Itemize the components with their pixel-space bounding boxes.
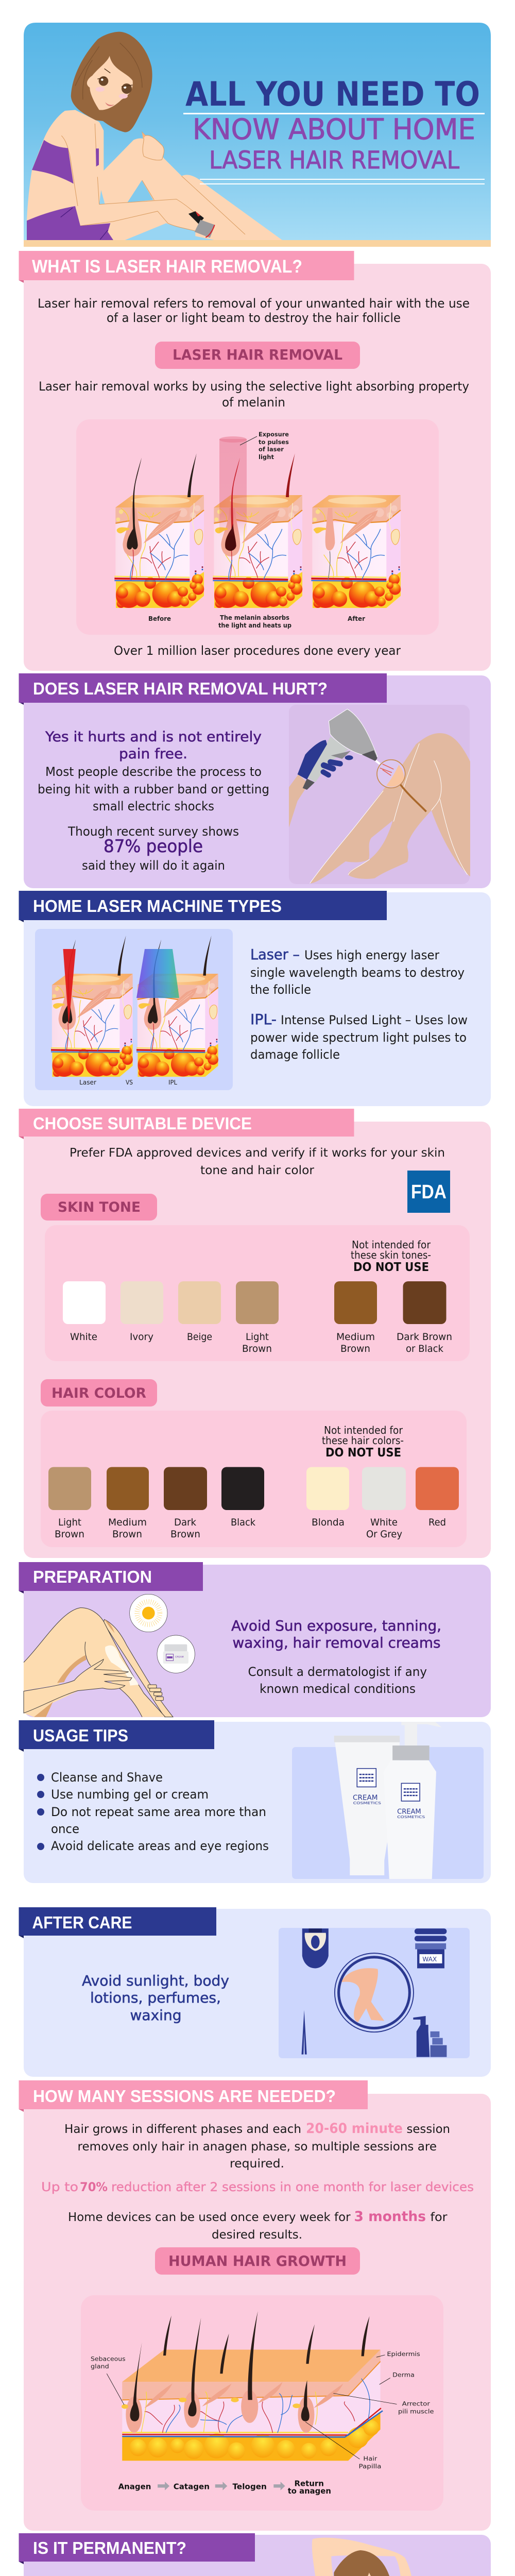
phases text: session — [407, 2123, 450, 2136]
title: KNOW ABOUT HOME — [193, 113, 475, 146]
title: ALL YOU NEED TO — [185, 75, 480, 114]
after care text: Avoid sunlight, body — [82, 1972, 229, 1989]
phases text: required. — [230, 2157, 284, 2171]
icon: cream jar: CREAM — [175, 1655, 184, 1658]
warning: skin: DO NOT USE — [353, 1261, 429, 1274]
intro text — [70, 1146, 445, 1177]
hair color label — [41, 1379, 157, 1406]
avoid text: waxing, hair removal creams — [233, 1634, 441, 1651]
illustration: applying cream to leg — [24, 1594, 195, 1717]
icon: tweezers — [302, 2010, 307, 2055]
skin tone swatches — [45, 1225, 470, 1361]
growth cycle: Anagen — [118, 2483, 151, 2492]
heading: USAGE TIPS — [33, 1726, 128, 1745]
skin tone names: Medium — [336, 1331, 375, 1343]
how it works text: Laser hair removal works by using the selective light absorbing property — [39, 379, 469, 394]
heading: AFTER CARE — [32, 1913, 132, 1932]
ipl description: damage follicle — [250, 1047, 340, 1062]
heading: HOW MANY SESSIONS ARE NEEDED? — [33, 2087, 336, 2106]
diagram: human hair growth: Papilla — [358, 2463, 381, 2470]
phases text: removes only hair in anagen phase, so multiple sessions are — [77, 2140, 437, 2154]
definition text: of a laser or light beam to destroy the hair follicle — [107, 311, 401, 325]
diagram: human hair growth: Sebaceous — [91, 2355, 126, 2362]
avoid text — [231, 1617, 441, 1651]
pain text: Though recent survey shows — [67, 824, 239, 839]
heading: DOES LASER HAIR REMOVAL HURT? — [33, 679, 328, 698]
pain text: being hit with a rubber band or getting — [38, 782, 269, 796]
icon: cream jar — [157, 1635, 195, 1673]
avoid text: Avoid Sun exposure, tanning, — [231, 1617, 441, 1634]
skin: laser — [51, 936, 133, 1077]
header banner — [24, 23, 491, 247]
tips list: Cleanse and Shave — [51, 1770, 163, 1785]
heading — [19, 891, 387, 920]
illustration: cream products: CREAM — [397, 1808, 421, 1816]
illustration: cream products: COSMETICS — [353, 1801, 382, 1805]
warning: hair: Not intended for — [324, 1424, 403, 1436]
after care text — [82, 1972, 229, 2024]
phases text: 20-60 minute — [306, 2121, 403, 2137]
heading — [19, 1720, 214, 1749]
diagram labels: light — [259, 453, 274, 461]
laser description: Laser – — [250, 946, 300, 963]
pain text — [38, 729, 269, 873]
tips list: Avoid delicate areas and eye regions — [51, 1839, 269, 1853]
panel: what is laser hair removal — [19, 251, 491, 671]
heading — [19, 1907, 216, 1936]
growth cycle: Catagen — [174, 2483, 210, 2492]
diagram: laser vs ipl — [35, 929, 233, 1090]
diagram: human hair growth: Derma — [392, 2371, 415, 2379]
intro text: tone and hair color — [200, 1164, 315, 1177]
pain text: Yes it hurts and is not entirely — [45, 729, 262, 745]
statistic text: Over 1 million laser procedures done every year — [114, 643, 401, 658]
illustration: laser treatment on legs — [289, 705, 470, 884]
after care text: waxing — [130, 2007, 181, 2024]
diagram: human hair growth: Epidermis — [387, 2350, 420, 2358]
growth cycle: Telogen — [233, 2483, 267, 2492]
hair color names: Black — [231, 1517, 255, 1528]
home devices text: Home devices can be used once every week for — [68, 2211, 351, 2224]
heading — [19, 2533, 255, 2562]
illustration: woman with epilator — [312, 2538, 413, 2576]
fda logo: FDA — [411, 1181, 447, 1203]
skin tone names: Dark Brown — [397, 1331, 452, 1343]
title — [183, 75, 485, 184]
pain text: pain free. — [119, 746, 187, 762]
illustration: cream products: CREAM — [353, 1794, 377, 1802]
pain text: 87% people — [104, 836, 203, 857]
illustration: cream products: COSMETICS — [397, 1815, 425, 1819]
skin: before — [114, 453, 204, 608]
pain text: Most people describe the process to — [45, 765, 262, 779]
skin cross section — [122, 2350, 383, 2461]
icon: epilator — [302, 1928, 329, 1968]
panel: does it hurt — [19, 673, 491, 888]
heading: CHOOSE SUITABLE DEVICE — [33, 1114, 252, 1133]
hairs — [130, 2311, 370, 2421]
warning: hair — [322, 1424, 404, 1460]
how it works text — [39, 379, 469, 410]
warning: hair: DO NOT USE — [325, 1446, 401, 1460]
skin tone names: or Black — [406, 1343, 443, 1354]
diagram labels: After — [348, 615, 365, 622]
consult text: known medical conditions — [260, 1682, 416, 1696]
hair color names: Light — [58, 1517, 81, 1528]
laser description — [250, 946, 465, 997]
heading: WHAT IS LASER HAIR REMOVAL? — [32, 257, 302, 277]
labels: VS — [126, 1079, 133, 1086]
consult text: Consult a dermatologist if any — [248, 1665, 427, 1679]
warning: skin: these skin tones- — [351, 1249, 431, 1261]
icon: wax — [415, 1928, 447, 1968]
pain text: small electric shocks — [93, 799, 214, 814]
heading — [19, 2080, 368, 2109]
warning: skin — [351, 1239, 431, 1274]
panel: home laser machine types — [19, 891, 491, 1106]
diagram: human hair growth: gland — [91, 2363, 109, 2370]
reduction text: Up to — [41, 2180, 78, 2194]
diagram labels: of laser — [259, 446, 284, 453]
title: LASER HAIR REMOVAL — [209, 146, 459, 175]
consult text — [248, 1665, 427, 1696]
diagram: human hair growth: pili muscle — [398, 2408, 434, 2415]
sub heading pill — [155, 2247, 360, 2275]
heading: IS IT PERMANENT? — [33, 2538, 186, 2557]
home devices text: desired results. — [212, 2228, 302, 2242]
diagram labels: Before — [148, 615, 171, 622]
phases text: Hair grows in different phases and each — [64, 2123, 301, 2136]
skin tone names: Brown — [242, 1343, 272, 1354]
tips list: Use numbing gel or cream — [51, 1787, 209, 1802]
panel: how many sessions — [19, 2080, 491, 2531]
skin tone names: Brown — [340, 1343, 370, 1354]
ipl description: IPL- — [250, 1011, 277, 1028]
ipl beam — [136, 949, 179, 998]
icon: sun — [130, 1594, 167, 1632]
definition text — [38, 296, 470, 325]
diagram: human hair growth: Hair — [363, 2455, 377, 2462]
tips list — [37, 1770, 269, 1853]
skin: ipl — [136, 936, 218, 1077]
hair color names: Brown — [55, 1529, 84, 1540]
heading — [19, 251, 354, 280]
home devices text: 3 months — [354, 2209, 426, 2225]
panel: usage tips — [19, 1720, 491, 1883]
hair color names: Medium — [108, 1517, 147, 1528]
hair color label: HAIR COLOR — [52, 1385, 146, 1401]
warning: hair: these hair colors- — [322, 1434, 404, 1447]
sub heading pill: LASER HAIR REMOVAL — [173, 346, 342, 363]
diagram: before, during, after — [76, 419, 439, 635]
labels — [107, 2355, 397, 2459]
diagram labels: the light and heats up — [218, 622, 291, 629]
phases text — [64, 2121, 450, 2171]
reduction text: reduction after 2 sessions in one month for laser devices — [111, 2180, 474, 2194]
hair color names: Or Grey — [366, 1529, 402, 1540]
skin tone names — [70, 1331, 452, 1354]
warning: skin: Not intended for — [352, 1239, 431, 1251]
skin tone label: SKIN TONE — [58, 1199, 141, 1215]
after care text: lotions, perfumes, — [90, 1989, 221, 2006]
panel: preparation — [19, 1562, 491, 1717]
skin tone names: White — [70, 1331, 97, 1343]
pain text: said they will do it again — [82, 858, 225, 873]
icon: mirror with legs — [335, 1953, 414, 2032]
hair color swatches — [41, 1411, 467, 1547]
illustration: woman using laser device — [27, 32, 282, 240]
home devices text — [68, 2209, 448, 2242]
growth cycle: Return — [294, 2479, 324, 2488]
heading — [19, 1109, 354, 1137]
ipl description: Intense Pulsed Light – Uses low — [281, 1013, 468, 1027]
heading: PREPARATION — [33, 1567, 152, 1586]
hair color names: Red — [428, 1517, 446, 1528]
labels — [79, 1079, 177, 1086]
intro text: Prefer FDA approved devices and verify if it works for your skin — [70, 1146, 445, 1160]
diagram labels: to pulses — [259, 438, 289, 446]
skin tone names: Beige — [187, 1331, 212, 1343]
ipl description: power wide spectrum light pulses to — [250, 1030, 467, 1045]
diagram labels — [148, 431, 365, 629]
growth cycle: to anagen — [288, 2487, 331, 2496]
tips list: Do not repeat same area more than — [51, 1805, 266, 1819]
diagram labels: Exposure — [259, 431, 289, 438]
skin: after — [311, 495, 401, 608]
skin: melanin absorbs — [213, 453, 302, 608]
labels: Laser — [79, 1079, 96, 1086]
hair color names: Dark — [174, 1517, 196, 1528]
sub heading pill: HUMAN HAIR GROWTH — [168, 2252, 347, 2269]
laser description: the follicle — [250, 982, 311, 997]
definition text: Laser hair removal refers to removal of your unwanted hair with the use — [38, 296, 470, 311]
hair color names — [55, 1517, 446, 1540]
diagram: human hair growth — [81, 2295, 443, 2511]
heading — [19, 1562, 203, 1591]
laser beam — [63, 949, 76, 1025]
hair color names: Blonda — [312, 1517, 345, 1528]
laser description: single wavelength beams to destroy — [250, 965, 465, 980]
heading: HOME LASER MACHINE TYPES — [33, 896, 282, 916]
hair color names: Brown — [112, 1529, 142, 1540]
panel: is it permanent — [19, 2533, 491, 2576]
fda logo — [407, 1171, 450, 1213]
ipl description — [250, 1011, 468, 1062]
reduction text: 70% — [80, 2180, 108, 2194]
hair color names: Brown — [170, 1529, 200, 1540]
skin tone names: Light — [246, 1331, 269, 1343]
illustration: hair removal tools — [279, 1928, 470, 2058]
tips list: once — [51, 1822, 79, 1836]
panel: choose suitable device — [19, 1109, 491, 1558]
skin tone label — [41, 1194, 157, 1221]
illustration: cream products — [292, 1722, 484, 1879]
skin tone names: Ivory — [130, 1331, 153, 1343]
icon: wax: WAX — [422, 1956, 437, 1963]
icon: bottles — [413, 2016, 447, 2057]
laser description: Uses high energy laser — [304, 948, 439, 962]
home devices text: for — [431, 2211, 448, 2224]
panel: after care — [19, 1907, 491, 2077]
growth cycle — [118, 2479, 331, 2496]
diagram labels: The melanin absorbs — [220, 614, 289, 621]
labels: IPL — [168, 1079, 177, 1086]
diagram: human hair growth: Arrector — [402, 2400, 430, 2408]
laser beam — [219, 436, 247, 537]
how it works text: of melanin — [222, 395, 285, 410]
heading — [19, 673, 387, 703]
hair color names: White — [370, 1517, 398, 1528]
sub heading pill — [155, 342, 360, 369]
